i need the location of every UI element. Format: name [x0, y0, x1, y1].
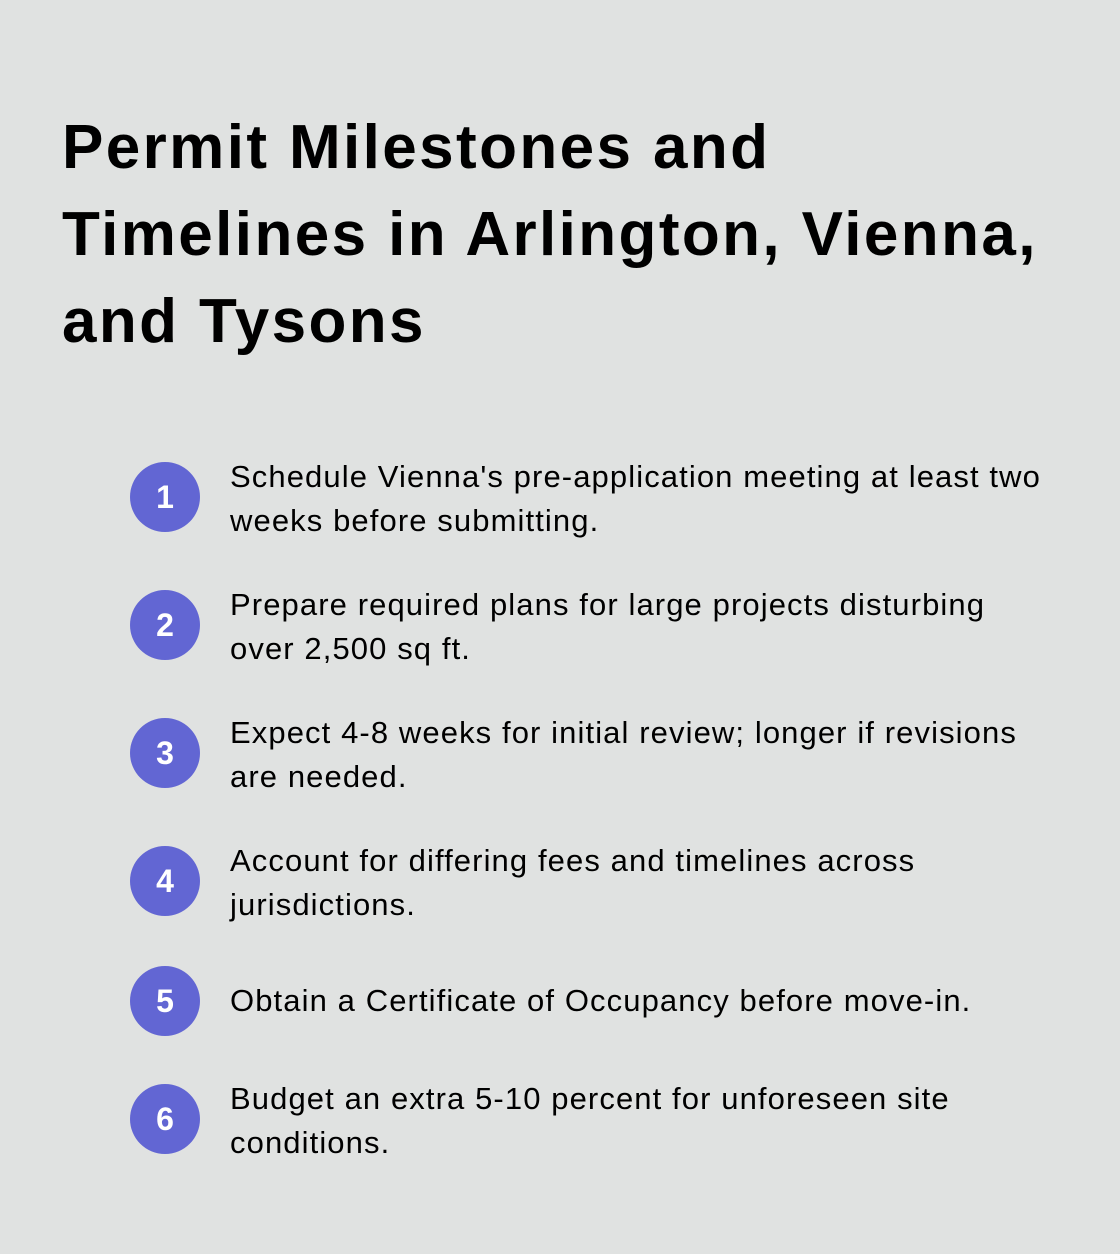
item 6: conditions. [230, 1125, 390, 1160]
title: and Tysons [62, 287, 426, 356]
item 3 [130, 715, 1017, 794]
item 5 [130, 966, 971, 1036]
item 1 [130, 459, 1041, 538]
item 4 [130, 843, 915, 922]
item 4: Account for differing fees and timelines across [230, 843, 915, 878]
title [62, 113, 1038, 356]
item 4: 4 [156, 863, 174, 899]
item 1: weeks before submitting. [230, 503, 599, 538]
item 3: 3 [156, 735, 174, 771]
item 2: 2 [156, 607, 174, 643]
item 3: Expect 4-8 weeks for initial review; longer if revisions [230, 715, 1017, 750]
item 6: Budget an extra 5-10 percent for unforeseen site [230, 1081, 950, 1116]
item 2: over 2,500 sq ft. [230, 631, 471, 666]
item 1: 1 [156, 479, 174, 515]
item 3: are needed. [230, 759, 408, 794]
title: Timelines in Arlington, Vienna, [62, 200, 1038, 269]
item 5: Obtain a Certificate of Occupancy before move-in. [230, 983, 971, 1018]
item 4: jurisdictions. [230, 887, 416, 922]
item 1: Schedule Vienna's pre-application meeting at least two [230, 459, 1041, 494]
item 2 [130, 587, 985, 666]
item 2: Prepare required plans for large projects disturbing [230, 587, 985, 622]
item 5: 5 [156, 983, 174, 1019]
title: Permit Milestones and [62, 113, 770, 182]
item 6: 6 [156, 1101, 174, 1137]
item 6 [130, 1081, 950, 1160]
